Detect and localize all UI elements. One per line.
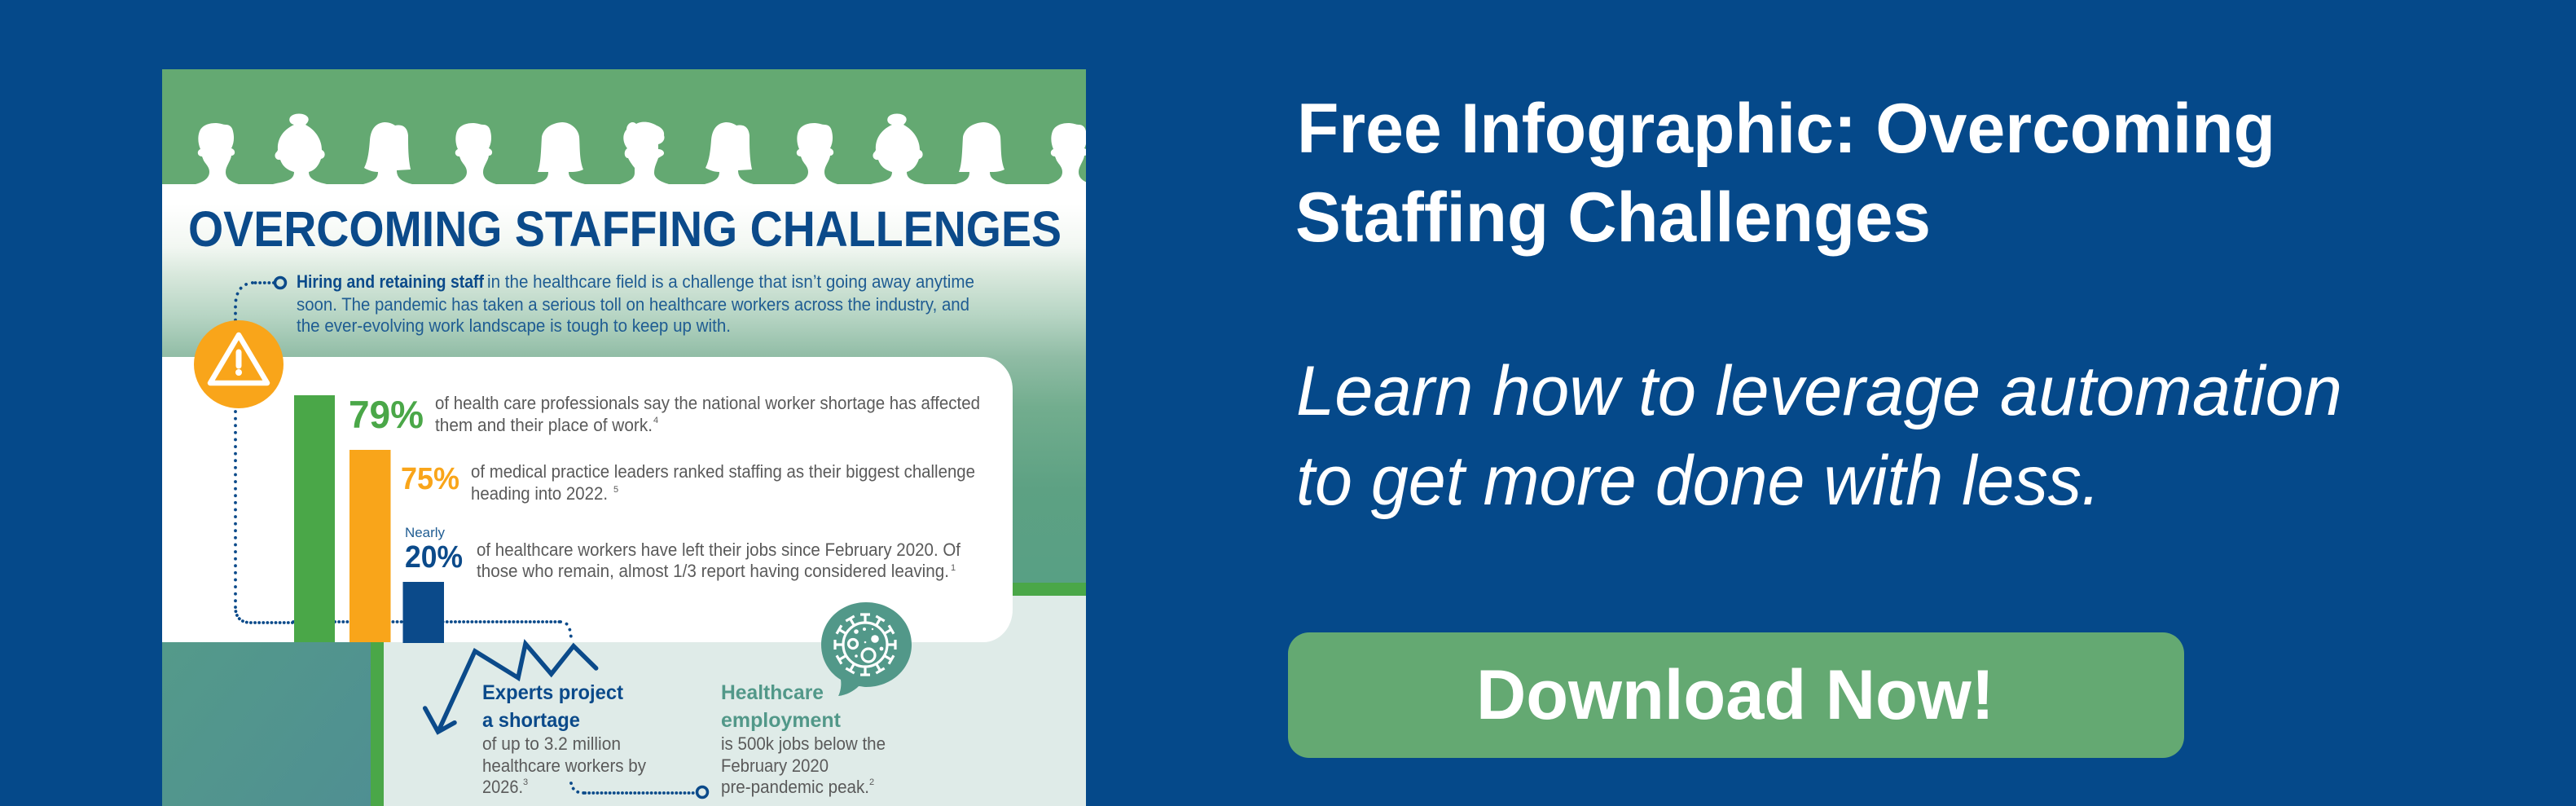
banner xyxy=(162,69,2340,806)
heading: free infographic: Staffing Challenges xyxy=(1295,178,1931,257)
stat: nearly 20%: Nearly xyxy=(405,525,445,540)
callout: experts project: 2026. xyxy=(482,777,523,797)
stat: 75%: heading into 2022. xyxy=(471,483,608,504)
stat: 79% xyxy=(350,396,979,435)
stat: nearly 20%: those who remain, almost 1/3 report having considered leaving. xyxy=(477,561,949,581)
teal block xyxy=(162,642,371,806)
callout: healthcare employment: 2 xyxy=(869,777,874,787)
stat: 75%: 5 xyxy=(613,485,618,495)
green header band xyxy=(162,69,1086,185)
callout: healthcare employment: Healthcare xyxy=(721,681,824,704)
stat: 75% xyxy=(401,461,975,504)
callout: healthcare employment: pre-pandemic peak. xyxy=(721,777,869,797)
panel: infographic preview xyxy=(162,69,1092,806)
connector end circles xyxy=(275,277,707,797)
stat: nearly 20%: 20% xyxy=(405,540,463,575)
title: OVERCOMING STAFFING CHALLENGES xyxy=(188,201,1062,257)
stat: 79%: of health care professionals say the national worker shortage has affected xyxy=(435,393,980,413)
callout: experts project xyxy=(482,681,646,797)
stat: nearly 20%: of healthcare workers have left their jobs since February 2020. Of xyxy=(477,540,961,560)
subheading: Learn how to leverage automation xyxy=(1296,352,2342,430)
dotted connector: top xyxy=(235,283,695,793)
stat: nearly 20%: 1 xyxy=(951,563,956,573)
icon: warning xyxy=(194,320,284,408)
stat: 79%: 4 xyxy=(653,416,658,425)
callout: experts project: of up to 3.2 million xyxy=(482,733,621,754)
intro text: in the healthcare field is a challenge that isn’t going away anytime xyxy=(487,271,974,292)
callout: healthcare employment xyxy=(721,681,886,797)
stat: 75%: 75% xyxy=(401,462,459,496)
stat: 79%: them and their place of work. xyxy=(435,415,653,435)
green divider strip xyxy=(1013,583,1086,596)
stat: nearly 20% xyxy=(405,525,961,581)
bar chart xyxy=(294,395,444,643)
subheading xyxy=(1296,352,2342,520)
callout: healthcare employment: is 500k jobs below the xyxy=(721,733,886,754)
callout: experts project: healthcare workers by xyxy=(482,755,646,776)
callout: experts project: 3 xyxy=(523,777,528,787)
green vertical strip xyxy=(371,642,384,806)
icon: virus speech bubble xyxy=(821,602,912,696)
callout: healthcare employment: February 2020 xyxy=(721,755,829,776)
heading: free infographic xyxy=(1295,90,2275,257)
heading: free infographic: Free Infographic: Overcoming xyxy=(1297,90,2275,168)
subheading: to get more done with less. xyxy=(1296,442,2100,520)
intro text xyxy=(297,271,974,336)
gradient background xyxy=(162,184,1086,584)
intro text: the ever-evolving work landscape is tough to keep up with. xyxy=(297,315,731,336)
stat: 75%: of medical practice leaders ranked staffing as their biggest challenge xyxy=(471,461,975,482)
button: download now: Download Now! xyxy=(1476,656,1994,734)
light lower panel xyxy=(384,596,1086,806)
callout: healthcare employment: employment xyxy=(721,709,842,732)
callout: experts project: Experts project xyxy=(482,681,624,704)
white stats panel xyxy=(162,357,1013,642)
callout: experts project: a shortage xyxy=(482,709,580,732)
button: download now xyxy=(1288,632,2184,758)
silhouettes row xyxy=(196,114,1092,184)
intro text: soon. The pandemic has taken a serious toll on healthcare workers across the industry, and xyxy=(297,294,969,315)
stat: 79%: 79% xyxy=(349,393,424,436)
intro text: Hiring and retaining staff xyxy=(297,271,485,292)
icon: falling zigzag arrow xyxy=(425,644,596,732)
